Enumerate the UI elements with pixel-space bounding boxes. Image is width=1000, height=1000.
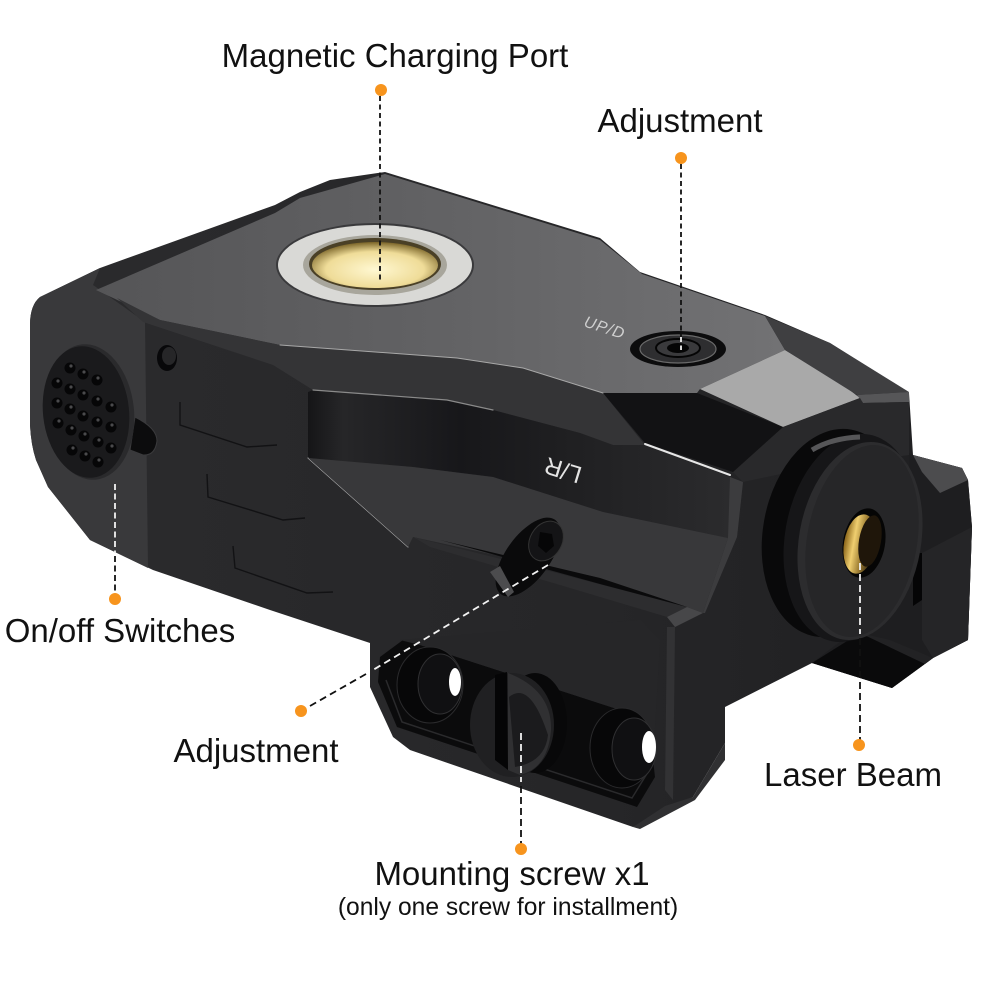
- note: one screw for installment: (only one screw for installment): [338, 894, 678, 921]
- leader: adjustment side: [303, 565, 548, 710]
- leader: magnetic charging port: [379, 96, 381, 280]
- rear rail: [812, 453, 972, 688]
- side embossed marks: [180, 402, 333, 593]
- highlight edges: [280, 345, 730, 547]
- L/R marking: L/R: [541, 451, 585, 488]
- lower ridge: [308, 458, 728, 613]
- label: laser beam: Laser Beam: [764, 756, 942, 793]
- upper right chamfer: [765, 316, 909, 395]
- small indicator dot: [157, 345, 177, 371]
- main body silhouette: [30, 172, 972, 827]
- mounting plate recess: [378, 620, 660, 807]
- front face above recess: [400, 620, 660, 760]
- leader: adjustment top: [680, 164, 682, 350]
- dark facet: [603, 393, 783, 472]
- label: adjustment side: Adjustment: [173, 732, 339, 769]
- recess band: [308, 390, 743, 538]
- left mounting hole: [397, 647, 463, 723]
- right chamfer edge: [857, 392, 909, 403]
- leader: on/off switches: [114, 484, 116, 596]
- right vertical chamfer: [703, 477, 743, 613]
- label: magnetic charging port: Magnetic Charging Port: [222, 37, 568, 74]
- groove strip: [413, 537, 687, 617]
- icon: charging port: [276, 223, 474, 307]
- right band below chamfer: [733, 398, 909, 482]
- label: on/off switches: On/off Switches: [5, 612, 235, 649]
- icon: up/down adjustment screw: [630, 331, 726, 367]
- label: adjustment top: Adjustment: [597, 102, 763, 139]
- icon: slotted mounting screw: [470, 672, 567, 777]
- icon: left/right adjustment screw: [483, 507, 573, 607]
- light chamfer: [700, 350, 860, 427]
- UP/D marking: UP/D: [582, 314, 627, 343]
- leader: laser beam: [859, 563, 861, 741]
- top plate: [96, 174, 785, 393]
- label: mounting screw: Mounting screw x1: [374, 855, 650, 892]
- laser sight product: [30, 172, 972, 829]
- left end cap: [30, 268, 148, 568]
- leader: mounting screw: [520, 733, 522, 845]
- upper ridge band: [117, 298, 645, 445]
- icon: laser lens housing: [746, 417, 937, 653]
- icon: on/off switch button: [36, 340, 157, 484]
- right mounting hole: [590, 708, 656, 788]
- callout dots: [109, 84, 865, 855]
